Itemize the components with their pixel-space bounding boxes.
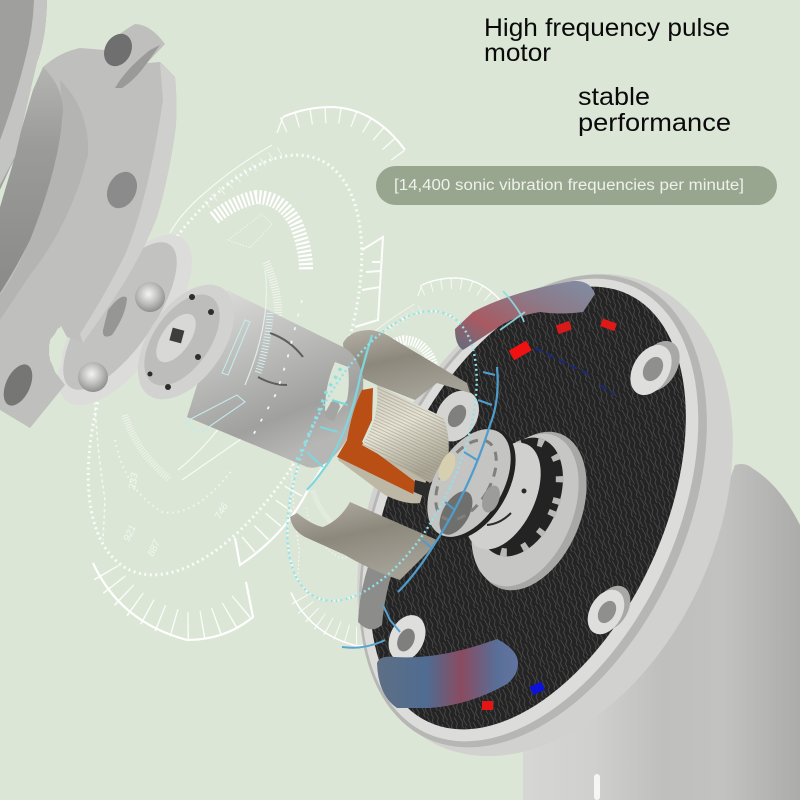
red LED 3 [600,319,617,331]
flange body [0,24,176,428]
blue LED [529,682,545,695]
coil base strip [338,440,427,503]
blue gauge arc on board [398,367,498,592]
window chrome clip [325,401,340,421]
impeller outline [410,413,534,555]
cyan dotted ring over head [248,283,516,629]
motor cylinder [187,290,363,468]
circuit board [306,237,750,779]
HUD: gauge numerals: 921 [122,523,139,543]
rim groove [289,219,777,800]
impeller shadow [433,486,479,540]
HUD: gauge numerals [122,472,231,558]
motor upper bracket [343,330,470,400]
lower ear slot [49,328,63,368]
inner wall left [358,525,405,629]
hatch band over motor [258,313,270,373]
flange cavity gap [0,160,14,207]
blue lower arc [342,605,400,648]
screw post lower left [381,609,433,667]
HUD: gauge numerals: 746 [213,501,231,522]
chrome ball bottom [78,362,108,392]
cyan bracket over motor [185,395,245,433]
motor housing [118,268,363,468]
silicone pad bottom [377,639,518,708]
HUD: gauge numerals: 887 [146,538,163,558]
red LED 1 [509,341,532,360]
cap screw holes [148,294,214,390]
screw posts [381,334,688,667]
square shaft socket [169,328,184,343]
exploded mount flange [0,0,176,428]
device handle neck [523,464,800,800]
subtitle: stable performance: stable [578,83,650,111]
screw post lower right [580,579,638,641]
motor lower bracket [290,502,437,580]
ear inner edge [115,45,160,88]
flange recessed band [0,67,63,293]
callout pill: vibration frequency [376,166,777,205]
outer rim [284,213,800,800]
orange copper frame [337,388,417,494]
cyan solid arc over motor [307,335,372,490]
hub core [450,431,556,561]
title: high frequency pulse motor: High frequency pulse [484,14,730,42]
mounting slot [103,296,127,337]
cyan outer arc on pad [500,291,525,330]
lower hole [0,360,38,410]
screw post upper right [622,334,688,402]
hub core hole [522,488,526,494]
hub outer wall [452,415,608,607]
impeller blades [423,430,509,530]
blue trace dashes [535,348,615,395]
indicator LEDs [482,319,617,710]
rear flange plate [0,0,47,190]
HUD: smaller sonic gauge rings [249,278,515,646]
silicone pad top [455,281,595,350]
coil winding [362,385,449,483]
callout pill: vibration frequency: [14,400 sonic vibration frequencies per minute] [394,177,744,194]
hub core dark arc [487,513,511,525]
white inner arc over motor [245,270,266,385]
HUD: main sonic gauge rings [32,107,418,640]
subtitle: stable performance: performance [578,109,731,137]
cyan dotted arc over motor [297,363,343,460]
HUD: gauge numerals: 233 [127,472,141,492]
flange outer rim strip [80,63,176,343]
title: high frequency pulse motor: motor [484,39,551,67]
HUD overlay on motor and board [185,270,525,648]
central hub [450,415,608,607]
clear fan impeller [410,413,534,555]
hub recess [461,425,579,569]
black motor terminal [414,480,430,498]
motor window slot [325,362,349,420]
plate glass [43,226,197,406]
motor cap inner [129,281,235,399]
motor slit lower [258,377,287,385]
cyan parallelogram over motor [222,320,250,375]
hub ring face [451,418,599,602]
motor slit upper [270,333,303,357]
inner lip [294,225,766,795]
motor end cap [118,268,254,416]
chrome ball top [135,282,165,312]
impeller hole [479,483,503,515]
flange ridge [0,80,88,320]
red LED 2 [556,321,572,334]
motor shaft collar [148,307,204,369]
ear hole [99,29,137,71]
brass bearing [435,451,459,483]
screw post behind motor [426,383,488,449]
device head disc [284,213,800,800]
cyan radial tick [307,400,348,467]
blue gauge ticks [422,372,495,548]
chrome coupling plate [33,214,217,426]
impeller body [410,415,528,551]
red LED 4 [482,701,493,710]
hub spokes [465,430,575,564]
indicator light slot [594,774,600,800]
face hole [101,167,143,213]
motor coil and copper [337,385,449,503]
white dash line over motor [252,300,302,437]
plate rim [33,214,217,426]
rear plate rim [0,0,47,185]
coil winding lines [362,385,449,483]
